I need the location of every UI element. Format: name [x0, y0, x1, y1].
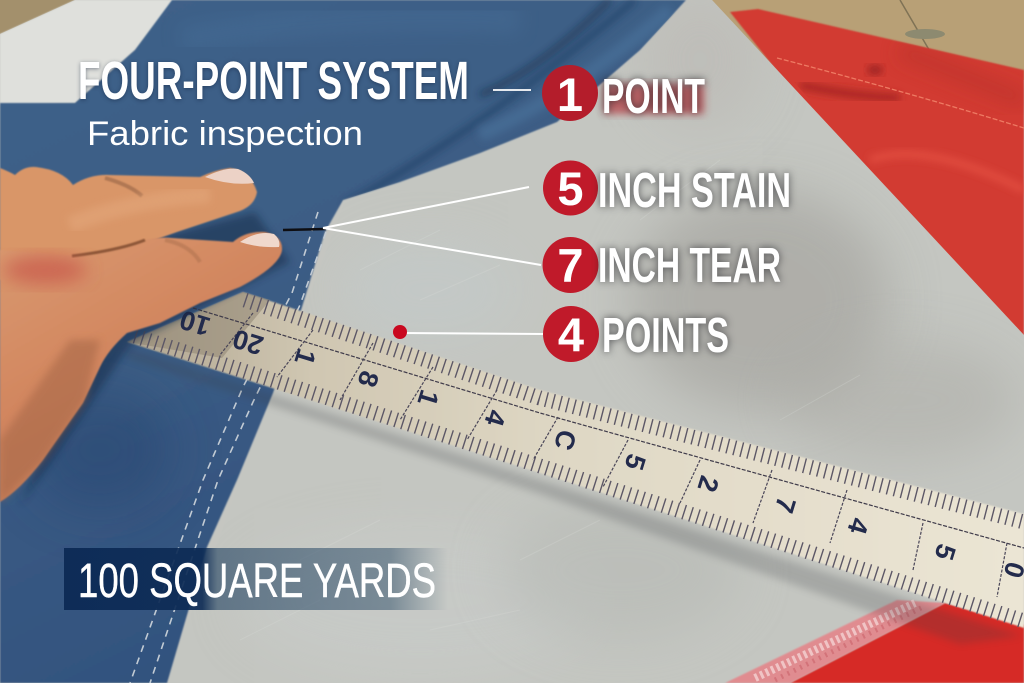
upper finger and knuckles [0, 167, 257, 280]
photo: work table top left [0, 0, 75, 34]
tape numerals: 2 [691, 472, 725, 496]
tape numerals: 10 [176, 304, 214, 342]
hand underside shade [0, 340, 100, 502]
finger knuckle lower [165, 240, 200, 262]
callout: 7 inch tear [542, 237, 781, 293]
photo: white fabric [0, 0, 175, 105]
subtitle: Fabric inspection [87, 115, 363, 153]
tear in seam [283, 229, 326, 230]
title: FOUR-POINT SYSTEM [78, 51, 469, 111]
finger highlight [70, 195, 210, 225]
callout: 5 inch stain: 5 [557, 162, 584, 215]
photo: blue fabric [0, 0, 686, 683]
marker dot [393, 325, 407, 339]
tape numerals: 7 [768, 493, 802, 517]
tape numerals: 5 [928, 540, 962, 564]
tape numerals: 8 [351, 367, 385, 391]
area label: 100 square yards: 100 SQUARE YARDS [78, 555, 436, 608]
callout: 5 inch stain: INCH STAIN [598, 164, 791, 218]
callout: 1 point: POINT [602, 70, 705, 124]
lower finger and back of hand [0, 232, 282, 502]
top edge ticks [245, 300, 1024, 522]
photo: gray fabric [268, 0, 1024, 630]
photo: woven pink trim [725, 600, 945, 683]
tape shadow [127, 348, 1022, 644]
major divisions [220, 313, 1007, 597]
upper nail [205, 169, 254, 184]
tape numerals: 1 [411, 386, 445, 410]
leader line: 4 points [400, 333, 545, 334]
tape shaded section [127, 292, 270, 358]
callout: 7 inch tear: 7 [557, 239, 584, 292]
hand shadow [20, 212, 290, 505]
knuckle crease [105, 178, 142, 196]
hand [0, 167, 282, 502]
callout: 1 point [542, 65, 705, 124]
tape numerals: 20 [229, 323, 267, 361]
callout: 4 points: POINTS [602, 309, 729, 363]
callout: 4 points: 4 [558, 308, 584, 361]
callout: 1 point: 1 [557, 68, 583, 121]
area label: 100 square yards [64, 548, 448, 610]
photo: double stitching [130, 212, 326, 683]
tape numerals [176, 304, 1024, 582]
lower nail [240, 233, 279, 247]
callout: 5 inch stain [543, 160, 791, 218]
callout: 7 inch tear: INCH TEAR [598, 239, 781, 293]
knuckle redness [3, 256, 87, 284]
centre line [193, 308, 1024, 548]
finger gap shadow [72, 240, 145, 256]
leader line: 7 inch tear [323, 228, 541, 265]
tape numerals: C [548, 426, 582, 454]
leader line: 1 point [493, 89, 531, 91]
measuring tape [127, 292, 1024, 628]
tape numerals: 1 [288, 345, 322, 369]
tape numerals: 4 [478, 406, 512, 430]
leader line: 5 inch stain [323, 187, 529, 228]
bottom edge ticks [135, 336, 1024, 621]
tape numerals: 5 [618, 450, 652, 474]
photo: work table top right [690, 0, 1024, 80]
callout: 4 points [543, 306, 729, 363]
tape numerals: 4 [841, 514, 875, 538]
photo: red fabric bottom right [790, 603, 1024, 683]
photo: red fabric top right [730, 9, 1024, 340]
